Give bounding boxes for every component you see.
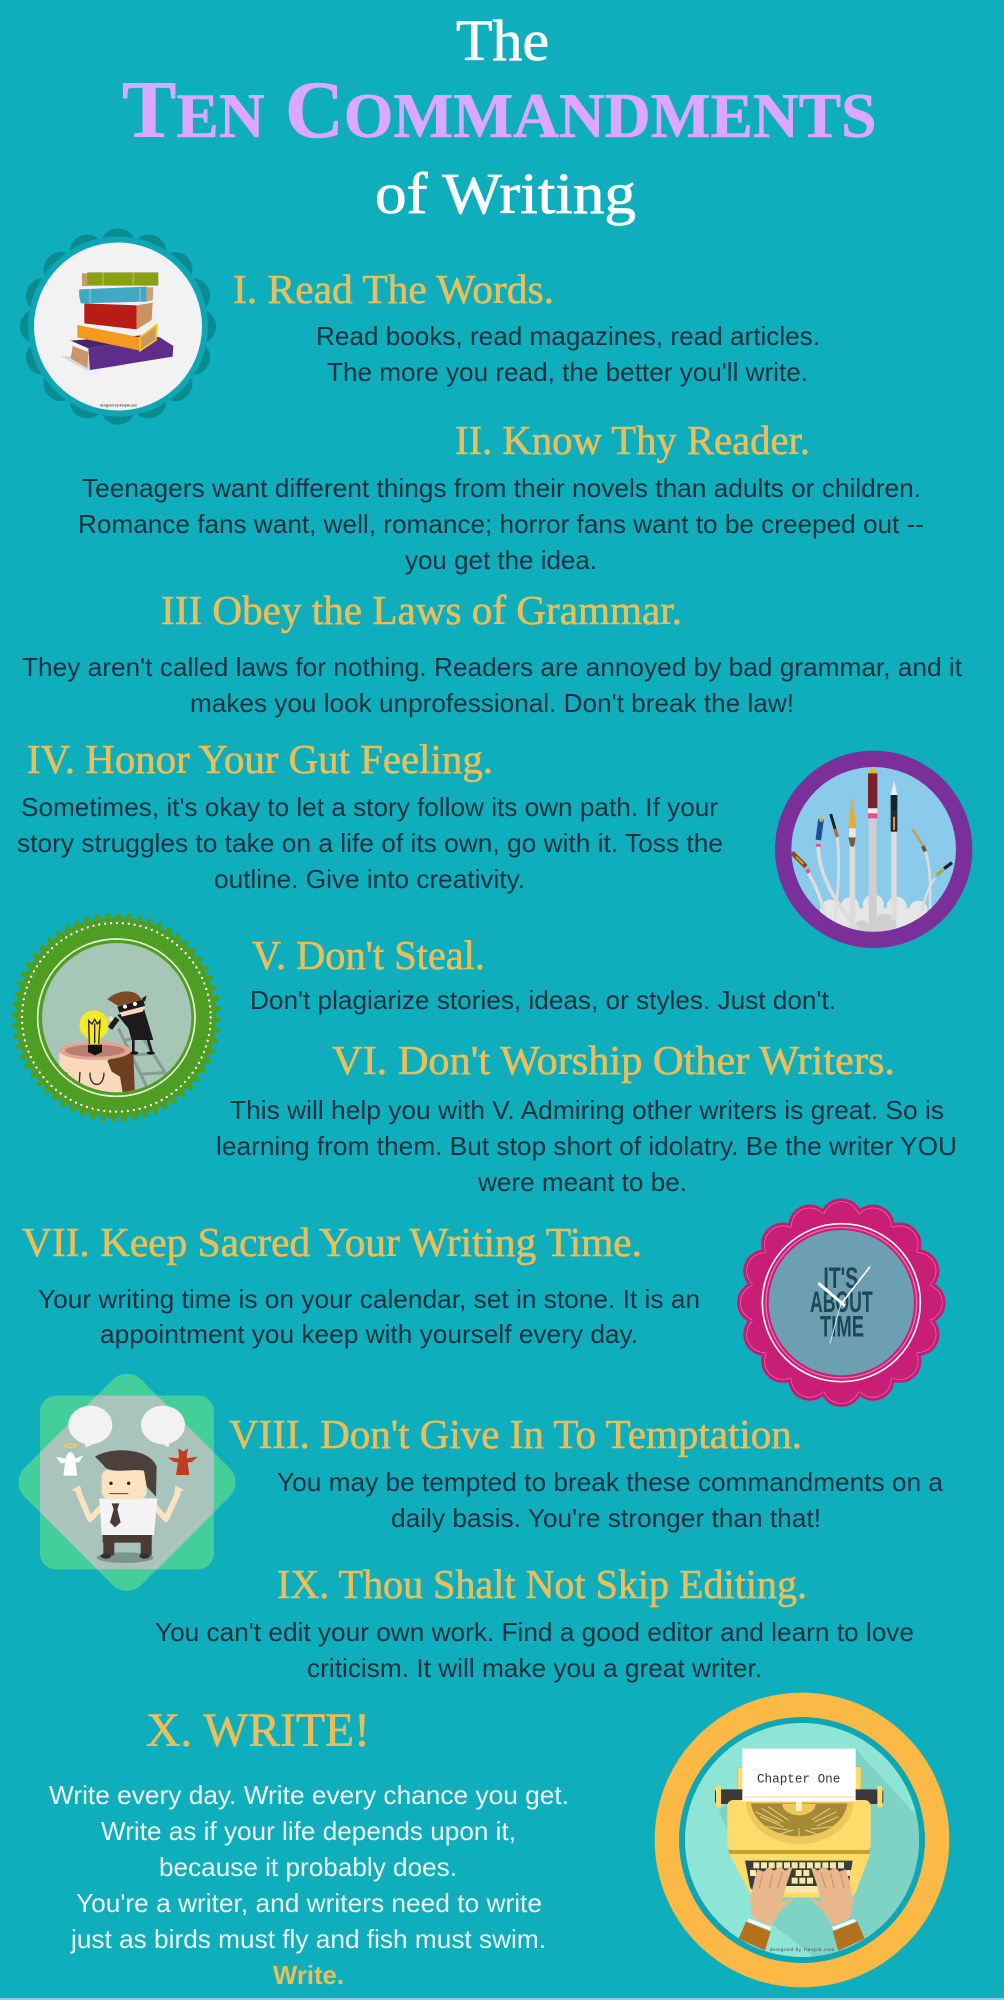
icon: stack of books badge xyxy=(20,228,216,425)
body III xyxy=(22,652,963,718)
heading III: III Obey the Laws of Grammar. xyxy=(161,587,682,633)
body II xyxy=(78,473,924,575)
body II: you get the idea. xyxy=(405,545,597,575)
heading VI: VI. Don't Worship Other Writers. xyxy=(332,1037,895,1083)
bottom edge line xyxy=(0,1998,1004,2000)
section III xyxy=(22,587,963,718)
body X: Write every day. Write every chance you get. xyxy=(49,1780,569,1810)
body X: because it probably does. xyxy=(159,1852,457,1882)
title xyxy=(122,8,876,226)
icon: typewriter badge: designed by freepik.com xyxy=(770,1947,834,1952)
icon: clock badge "It's about time": IT'S xyxy=(823,1262,858,1295)
body VI: were meant to be. xyxy=(477,1167,687,1197)
section V xyxy=(250,932,836,1015)
body IV: story struggles to take on a life of its own, go with it. Toss the xyxy=(17,828,723,858)
heading VII: VII. Keep Sacred Your Writing Time. xyxy=(22,1219,642,1265)
section II xyxy=(78,417,924,575)
body VII: appointment you keep with yourself every day. xyxy=(100,1319,638,1349)
body VI xyxy=(216,1095,957,1197)
icon: typewriter badge: Chapter One xyxy=(757,1771,840,1786)
section VI xyxy=(216,1037,957,1197)
icon: clock badge "It's about time": TIME xyxy=(820,1311,864,1344)
section IV xyxy=(17,736,723,894)
body VIII: daily basis. You're stronger than that! xyxy=(391,1503,821,1533)
body X: Write. xyxy=(273,1960,344,1990)
heading IX: IX. Thou Shalt Not Skip Editing. xyxy=(277,1561,807,1607)
section VIII xyxy=(229,1411,944,1533)
title line: of Writing: of Writing xyxy=(375,161,636,226)
body IX: criticism. It will make you a great writer. xyxy=(307,1653,762,1683)
section VII xyxy=(22,1219,700,1349)
title line: The: The xyxy=(456,8,549,73)
section X xyxy=(49,1704,569,1990)
title line: Ten Commandments: TEN COMMANDMENTS xyxy=(122,64,876,155)
body III: makes you look unprofessional. Don't break the law! xyxy=(190,688,794,718)
heading X: X. WRITE! xyxy=(146,1704,370,1757)
body VIII: You may be tempted to break these commandments on a xyxy=(277,1467,944,1497)
body IV xyxy=(17,792,723,894)
body VII: Your writing time is on your calendar, set in stone. It is an xyxy=(38,1284,700,1314)
icon: clock badge "It's about time" xyxy=(741,1202,942,1403)
heading IV: IV. Honor Your Gut Feeling. xyxy=(27,736,493,782)
body I xyxy=(316,321,820,387)
body IV: outline. Give into creativity. xyxy=(214,864,525,894)
section I xyxy=(233,266,820,387)
icon: man with angel and devil xyxy=(18,1374,236,1591)
body VIII xyxy=(277,1467,944,1533)
heading VIII: VIII. Don't Give In To Temptation. xyxy=(229,1411,802,1457)
body I: The more you read, the better you'll write. xyxy=(327,357,808,387)
body IX: You can't edit your own work. Find a good editor and learn to love xyxy=(155,1617,914,1647)
body X xyxy=(49,1780,569,1990)
body I: Read books, read magazines, read articles. xyxy=(316,321,820,351)
icon: pens launching like rockets xyxy=(775,751,972,948)
body X: just as birds must fly and fish must swim. xyxy=(70,1924,546,1954)
icon: typewriter badge xyxy=(655,1693,949,1987)
section IX xyxy=(155,1561,914,1683)
body X: You're a writer, and writers need to write xyxy=(76,1888,542,1918)
icon: thief stealing lightbulb badge xyxy=(14,915,218,1119)
body X: Write as if your life depends upon it, xyxy=(101,1816,516,1846)
body II: Romance fans want, well, romance; horror fans want to be creeped out -- xyxy=(78,509,924,539)
body VII xyxy=(38,1284,700,1349)
body IX xyxy=(155,1617,914,1683)
icon: stack of books badge: designed by freepik.com xyxy=(100,403,137,407)
icon: clock badge "It's about time": ABOUT xyxy=(810,1286,873,1319)
heading V: V. Don't Steal. xyxy=(252,932,485,978)
body II: Teenagers want different things from their novels than adults or children. xyxy=(82,473,921,503)
body VI: learning from them. But stop short of idolatry. Be the writer YOU xyxy=(216,1131,957,1161)
body V: Don't plagiarize stories, ideas, or styles. Just don't. xyxy=(250,985,836,1015)
heading II: II. Know Thy Reader. xyxy=(455,417,810,463)
body VI: This will help you with V. Admiring other writers is great. So is xyxy=(230,1095,944,1125)
body III: They aren't called laws for nothing. Readers are annoyed by bad grammar, and it xyxy=(22,652,963,682)
body IV: Sometimes, it's okay to let a story follow its own path. If your xyxy=(21,792,718,822)
heading I: I. Read The Words. xyxy=(233,266,554,312)
